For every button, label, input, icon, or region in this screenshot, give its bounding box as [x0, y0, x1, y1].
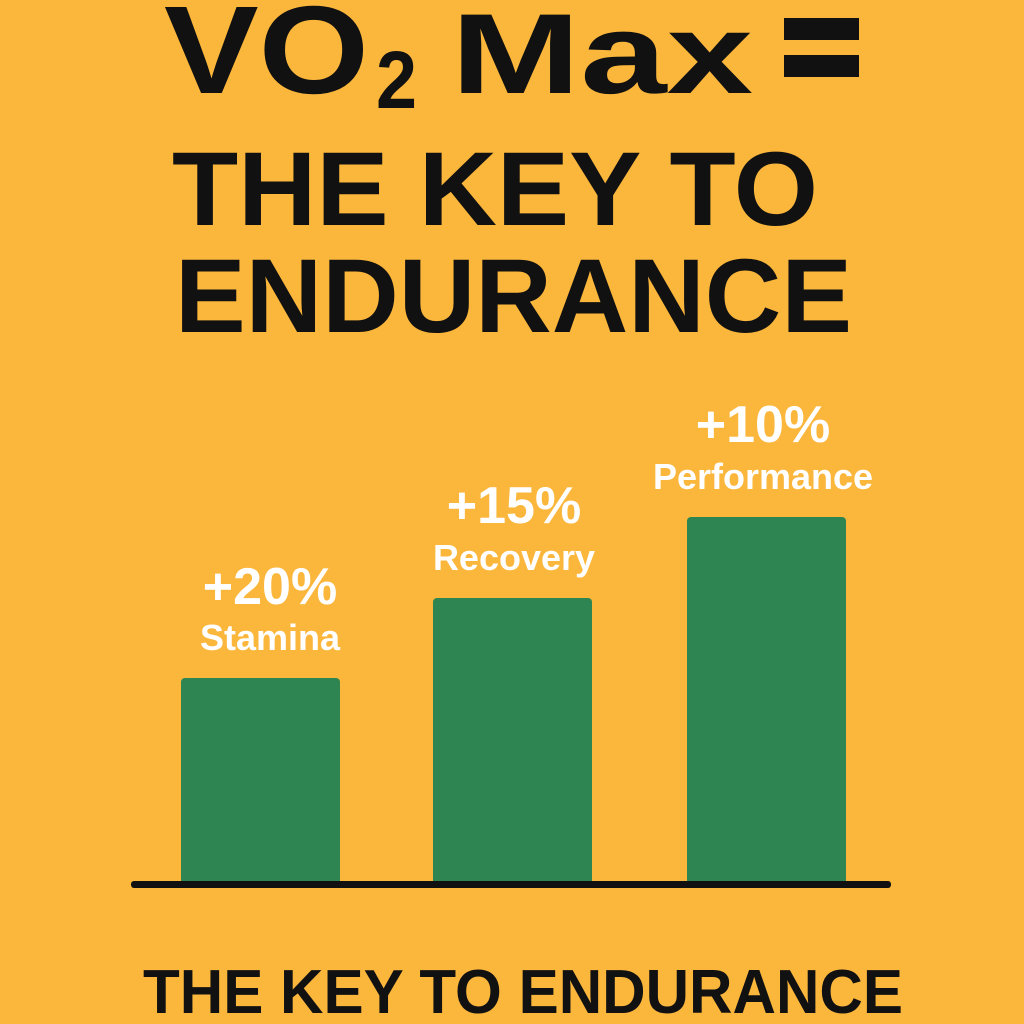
bar: recovery — [433, 598, 592, 885]
label: recovery: Recovery — [433, 537, 595, 578]
axis line — [131, 881, 891, 888]
title line 1: 2 — [376, 35, 417, 126]
label: performance: Performance — [653, 456, 873, 497]
label: recovery: +15% — [447, 477, 581, 535]
title line 1 — [164, 0, 859, 126]
bar: performance — [687, 517, 846, 885]
label: stamina — [200, 558, 341, 658]
title line 2: THE KEY TO — [172, 131, 818, 248]
bar chart — [131, 396, 891, 888]
label: recovery — [433, 477, 595, 578]
label: performance: +10% — [696, 396, 830, 454]
title line 3: ENDURANCE — [175, 238, 852, 355]
label: performance — [653, 396, 873, 497]
label: stamina: +20% — [203, 558, 337, 616]
bar: stamina — [181, 678, 340, 885]
label: stamina: Stamina — [200, 617, 341, 658]
